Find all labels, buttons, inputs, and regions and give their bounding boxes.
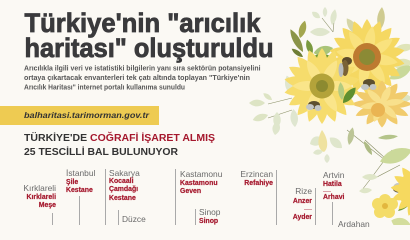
province: Sinop: Sinop xyxy=(199,218,218,224)
province: Erzincan: Refahiye xyxy=(244,180,273,186)
subheading: TÜRKİYE'DE COĞRAFİ İŞARET ALMIŞ xyxy=(24,131,215,144)
province: Düzce: Düzce xyxy=(122,214,146,224)
peony xyxy=(352,80,410,128)
sunflower bottom right xyxy=(390,162,410,218)
province: Ardahan: Ardahan xyxy=(338,218,370,228)
intro text: Arıcılıkla ilgili veri ve istatistiki bilgilerin yanı sıra sektörün potansiyelini xyxy=(24,66,261,72)
province: Kastamonu: Kastamonu xyxy=(180,180,218,186)
province: İstanbul: Kestane xyxy=(66,187,93,194)
province: Rize: Rize xyxy=(295,186,312,196)
province: Kırklareli: Kırklareli xyxy=(26,194,56,201)
province: Kastamonu xyxy=(180,168,222,195)
province: Sakarya: Çamdağı xyxy=(109,186,138,193)
title xyxy=(24,8,274,63)
sunflower right xyxy=(328,19,406,95)
province: Artvin xyxy=(323,170,344,201)
province: Rize: Ayder xyxy=(293,214,312,221)
province: Kırklareli: Kırklareli xyxy=(23,183,56,193)
province: Artvin: Hatila xyxy=(323,180,342,188)
province: Kırklareli xyxy=(23,183,56,209)
title: Türkiye'nin "arıcılık xyxy=(24,8,261,38)
province: Erzincan: Erzincan xyxy=(240,168,273,178)
flower bud xyxy=(318,130,327,152)
province: İstanbul xyxy=(66,168,95,194)
province: Sakarya xyxy=(109,168,140,202)
green leaves over flowers xyxy=(337,82,359,105)
province: Artvin: Arhavi xyxy=(323,194,344,201)
province: Sinop xyxy=(199,206,220,225)
province: Sakarya: Kocaali xyxy=(109,178,134,185)
subheading: 25 TESCİLLİ BAL BULUNUYOR xyxy=(24,145,179,158)
intro text: ortaya çıkartacak envanterleri tek çatı altında toplayan "Türkiye'nin xyxy=(24,75,250,82)
province: Erzincan xyxy=(240,168,273,187)
url: balharitasi.tarimorman.gov.tr xyxy=(24,110,150,120)
province: İstanbul: İstanbul xyxy=(66,168,95,178)
title: haritası" oluşturuldu xyxy=(24,33,274,63)
bees xyxy=(306,57,405,193)
province: Kırklareli: Meşe xyxy=(39,202,56,209)
province: Rize: Anzer xyxy=(293,198,312,204)
leaves xyxy=(249,7,410,234)
stems xyxy=(268,12,400,190)
small yellow flower xyxy=(372,194,398,218)
url bar xyxy=(0,106,159,124)
province: İstanbul: Şile xyxy=(66,179,78,186)
province: Sakarya: Kestane xyxy=(109,195,136,202)
sunflower left xyxy=(283,48,361,124)
province: Sinop: Sinop xyxy=(199,206,220,216)
intro text: Arıcılık Haritası" internet portalı kullanıma sunuldu xyxy=(24,84,185,92)
province: Rize xyxy=(292,186,312,221)
province: Kastamonu: Geven xyxy=(180,188,201,195)
subheading xyxy=(24,131,215,158)
province: Sakarya: Sakarya xyxy=(109,168,140,178)
province: Kastamonu: Kastamonu xyxy=(180,168,222,178)
intro text xyxy=(24,66,261,92)
province: Artvin: Artvin xyxy=(323,170,344,180)
